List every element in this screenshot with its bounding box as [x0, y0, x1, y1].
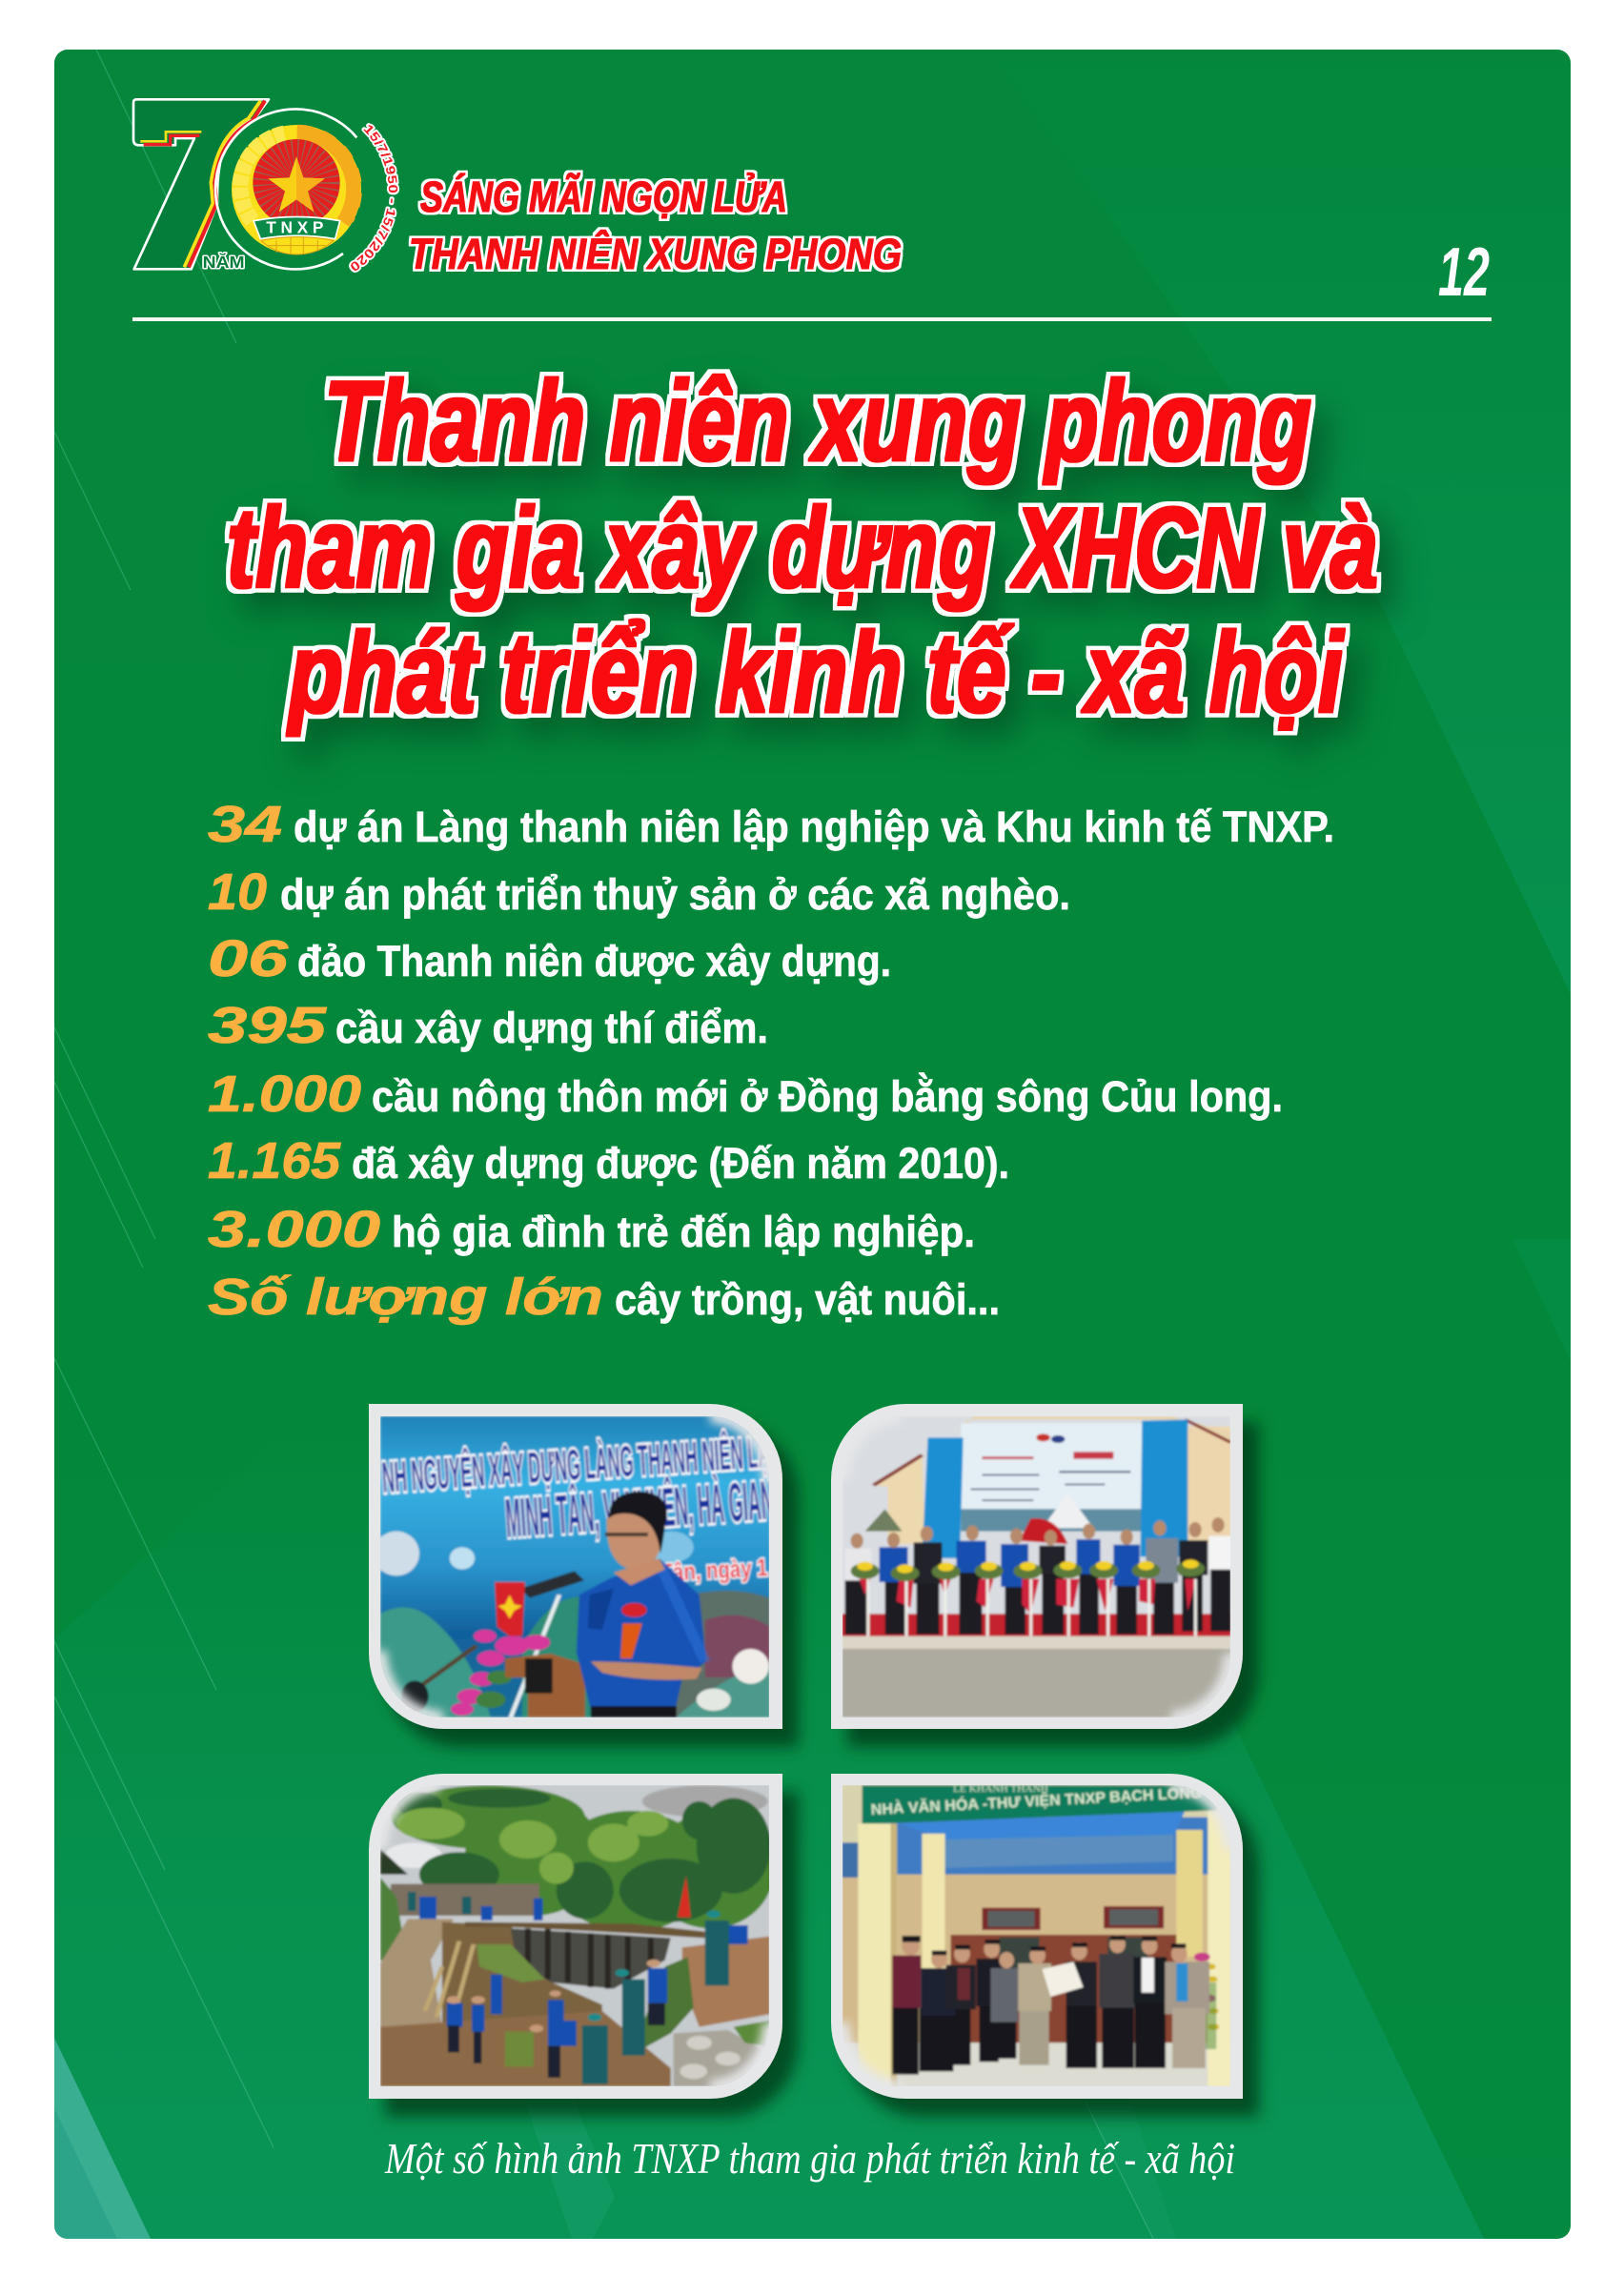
logo: 70 years TNXP emblem	[132, 98, 399, 273]
stat row: Số lượng lớn: cây trồng, vật nuôi...	[615, 1275, 1000, 1324]
stat row: 3.000	[208, 1201, 975, 1258]
stat row: 395: 395	[208, 997, 327, 1054]
ring of the digit 0	[215, 109, 356, 269]
slogan heading: THANH NIÊN XUNG PHONG	[409, 230, 902, 278]
stat row: 1.165	[208, 1132, 1009, 1189]
stat row: 06: 06	[208, 930, 289, 987]
photo frame 3: building a bridge	[369, 1774, 782, 2099]
photo frame 2: ribbon cutting ceremony	[831, 1404, 1243, 1729]
infographic page: NH NGUYỆN XÂY DỰNG LÀNG THANH NIÊN LẬ	[380, 1427, 772, 1502]
stat row: 395	[208, 997, 768, 1054]
stat row: 1.000: cầu nông thôn mới ở Đồng bằng sông Củu long.	[372, 1072, 1283, 1121]
photo frame 4: library handover group photo	[831, 1774, 1243, 2099]
photo frame 1: speaker at youth village: Tân, ngày 1	[660, 1553, 768, 1587]
stat row: 06	[208, 930, 891, 987]
emblem	[232, 125, 361, 254]
stat row: 34: dự án Làng thanh niên lập nghiệp và Khu kinh tế TNXP.	[294, 803, 1334, 851]
stat row: 34: 34	[208, 796, 282, 853]
stat row: Số lượng lớn	[208, 1269, 1000, 1326]
stat row: 1.000	[208, 1066, 1283, 1123]
caption: Một số hình ảnh TNXP tham gia phát triển kinh tế - xã hội	[384, 2134, 1235, 2183]
emblem: TNXP	[266, 217, 328, 236]
stat row: 1.165: đã xây dựng được (Đến năm 2010).	[352, 1139, 1009, 1188]
main title: Thanh niên xung phong	[324, 357, 1311, 485]
stat row: 10: 10	[208, 864, 267, 921]
year label NĂM: NĂM	[203, 253, 245, 272]
slogan heading: SÁNG MÃI NGỌN LỬA	[420, 173, 787, 221]
stat row: 1.000: 1.000	[208, 1066, 361, 1123]
stat row: 395: cầu xây dựng thí điểm.	[335, 1004, 768, 1052]
photo frame 4: library handover group photo: NHÀ VĂN HÓA -THƯ VIỆN TNXP BẠCH LONG	[870, 1783, 1203, 1819]
main title: phát triển kinh tế - xã hội	[287, 609, 1345, 737]
stat row: Số lượng lớn: Số lượng lớn	[208, 1269, 603, 1326]
main title	[227, 357, 1378, 737]
date arc text: 15/7/1950 - 15/7/2020	[349, 123, 399, 273]
stat row: 3.000: hộ gia đình trẻ đến lập nghiệp.	[392, 1208, 975, 1256]
statistics list	[208, 796, 1334, 1326]
photo frame 1: speaker at youth village	[369, 1404, 782, 1729]
stat row: 3.000: 3.000	[208, 1201, 380, 1258]
digit 7	[133, 99, 269, 269]
slogan heading	[409, 173, 902, 278]
stat row: 06: đảo Thanh niên được xây dựng.	[297, 937, 891, 985]
page number: 12	[1438, 234, 1490, 311]
stat row: 1.165: 1.165	[208, 1132, 341, 1189]
infographic page: MINH TÂN, VỊ XUYÊN, HÀ GIAN	[503, 1469, 776, 1550]
photo frame 4: library handover group photo: LỄ KHÁNH THÀNH	[953, 1782, 1048, 1795]
stat row: 10: dự án phát triển thuỷ sản ở các xã nghèo.	[280, 870, 1070, 919]
